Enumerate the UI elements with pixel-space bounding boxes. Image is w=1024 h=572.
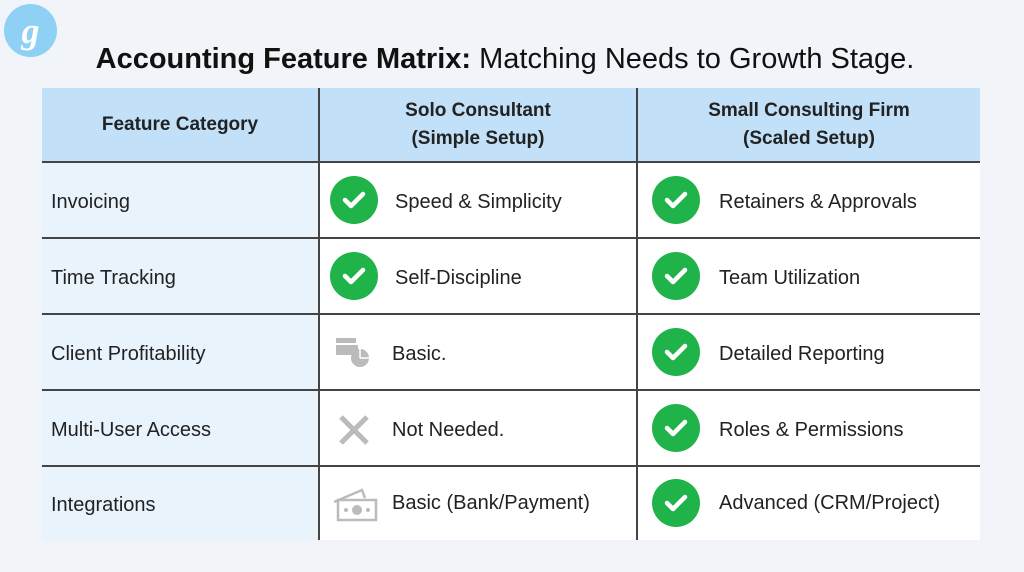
header: solo: (Simple Setup) [411,128,544,149]
header: firm: Small Consulting Firm [708,100,910,121]
icon: cash [334,488,378,522]
row labels: Invoicing [51,190,130,212]
header: firm: (Scaled Setup) [743,128,875,149]
header: solo: Solo Consultant [405,100,551,121]
table [42,88,980,540]
firm column: Advanced (CRM/Project) [719,492,940,514]
row labels: Multi-User Access [51,418,211,440]
row labels: Integrations [51,494,156,516]
row labels: Client Profitability [51,342,206,364]
solo column: Basic. [392,342,446,364]
solo column: Speed & Simplicity [395,190,562,212]
header row [42,88,980,162]
solo column [330,176,590,522]
title: Accounting Feature Matrix: Matching Needs to Growth Stage. [96,43,914,75]
firm column: Retainers & Approvals [719,190,917,212]
solo column: Self-Discipline [395,266,522,288]
firm column [652,176,940,527]
icon: chart [336,338,369,367]
solo column: Not Needed. [392,418,504,440]
header: solo [405,100,551,149]
firm column: Team Utilization [719,266,860,288]
icon: x [339,415,369,445]
firm column: Detailed Reporting [719,342,885,364]
row labels [51,190,211,516]
row labels: Time Tracking [51,266,176,288]
header: feature category: Feature Category [102,114,258,135]
header: firm [708,100,910,149]
first column bg [42,162,318,540]
firm column: Roles & Permissions [719,418,904,440]
solo column: Basic (Bank/Payment) [392,492,590,514]
logo: g [22,10,40,50]
logo [4,4,57,57]
